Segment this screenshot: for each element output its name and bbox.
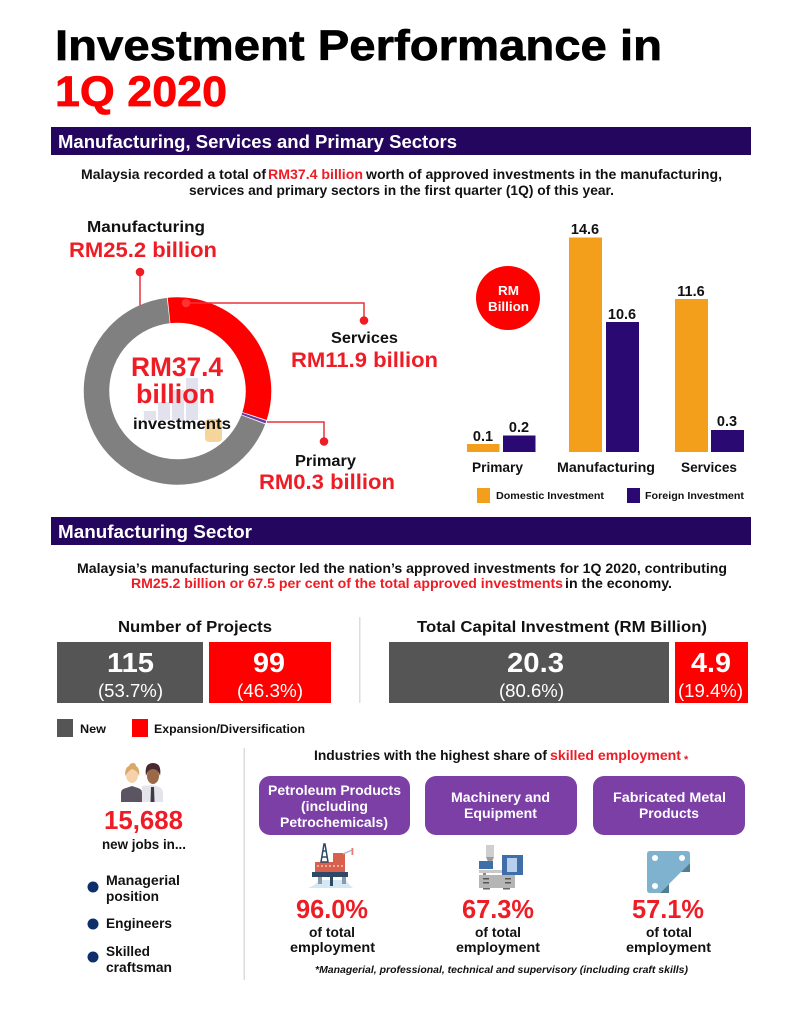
manufacturing paragraph: Malaysia’s manufacturing sector led the nation’s approved investments for 1Q 2020, contributing (77, 561, 727, 576)
panel: new jobs (88, 763, 186, 975)
panel: number of projects: 99 (253, 647, 285, 678)
bars: primary: 0.1 (473, 429, 493, 445)
label: primary (259, 453, 395, 494)
list: job types (88, 872, 180, 975)
title (55, 22, 662, 116)
icon: two employees (121, 763, 163, 802)
chart legend (477, 488, 745, 503)
panel: petroleum products (259, 776, 410, 955)
bars: manufacturing: 14.6 (571, 222, 599, 238)
callout line: services (182, 299, 368, 325)
stat: 57.1%: 57.1% (632, 894, 704, 924)
unit badge: Billion (488, 300, 529, 314)
donut chart: investments by sector (69, 219, 438, 494)
list: job types: Managerial (106, 872, 180, 888)
bar chart: domestic and foreign investment (467, 222, 745, 503)
legend: new and expansion (57, 719, 305, 737)
manufacturing paragraph: in the economy. (565, 576, 672, 591)
legend: new and expansion: New (80, 722, 107, 736)
bars: manufacturing: 10.6 (608, 307, 636, 323)
panel: number of projects (57, 619, 331, 703)
list: job types: position (106, 888, 159, 904)
stat: 67.3%: of total (475, 924, 521, 940)
list: job types: Engineers (106, 915, 172, 931)
title: 1Q 2020 (55, 68, 227, 116)
panel: fabricated metal products: Products (639, 805, 699, 821)
bars: primary: 0.2 (509, 420, 529, 436)
label: manufacturing (69, 219, 217, 262)
unit badge: RM (498, 284, 519, 298)
panel: fabricated metal products: Fabricated Metal (613, 789, 726, 805)
chart legend: Domestic Investment (496, 490, 605, 502)
panel: total capital investment: 4.9 (691, 647, 731, 678)
panel: machinery and equipment (425, 776, 577, 955)
title: Investment Performance in (55, 22, 662, 70)
donut centre total: billion (136, 379, 215, 409)
bars: services: 11.6 (677, 284, 705, 300)
label: primary: Primary (295, 453, 356, 470)
footnote: *Managerial, professional, technical and supervisory (including craft skills) (315, 964, 688, 976)
callout line: primary (267, 422, 328, 446)
icon: machine (479, 845, 523, 890)
intro paragraph: worth of approved investments in the manufacturing, (365, 167, 722, 182)
panel: total capital investment: (19.4%) (678, 680, 743, 701)
manufacturing paragraph: RM25.2 billion or 67.5 per cent of the total approved investments (131, 576, 563, 591)
stat: 96.0%: employment (290, 939, 375, 955)
panel: total capital investment (389, 619, 748, 703)
panel: fabricated metal products (593, 776, 745, 955)
panel: number of projects: (53.7%) (98, 680, 163, 701)
stat: 96.0% (290, 894, 375, 955)
category labels (472, 459, 737, 475)
heading: skilled employment: Industries with the highest share of (314, 748, 548, 763)
bars: manufacturing (569, 222, 639, 452)
category labels: Primary (472, 459, 523, 475)
manufacturing paragraph (77, 561, 727, 591)
chart legend: Foreign Investment (645, 490, 745, 502)
intro paragraph: services and primary sectors in the first quarter (1Q) of this year. (189, 183, 614, 198)
donut centre total: investments (133, 416, 231, 433)
panel: petroleum products: Petrochemicals) (280, 814, 388, 830)
panel: petroleum products: Petroleum Products (268, 782, 401, 798)
stat: 67.3% (456, 894, 540, 955)
donut centre total: RM37.4 (131, 352, 223, 382)
label: manufacturing: RM25.2 billion (69, 239, 217, 262)
category labels: Manufacturing (557, 459, 655, 475)
category labels: Services (681, 459, 737, 475)
heading: skilled employment: skilled employment (550, 748, 682, 763)
label: services: RM11.9 billion (291, 349, 438, 372)
stat: 57.1%: employment (626, 939, 711, 955)
panel: total capital investment: (80.6%) (499, 680, 564, 701)
section header: manufacturing, services and primary (51, 127, 751, 155)
panel: number of projects: (46.3%) (237, 680, 303, 701)
jobs figure (102, 805, 186, 852)
stat: 67.3%: employment (456, 939, 540, 955)
stat: 57.1% (626, 894, 711, 955)
faded icon: bars and coins (144, 378, 222, 442)
heading: skilled employment (314, 748, 689, 766)
bars: primary (467, 420, 536, 452)
intro paragraph (81, 167, 722, 198)
jobs figure: 15,688 (104, 805, 183, 835)
panel: machinery and equipment: Equipment (464, 805, 537, 821)
stat: 67.3%: 67.3% (462, 894, 534, 924)
jobs figure: new jobs in... (102, 836, 186, 852)
panel: total capital investment: 20.3 (507, 647, 564, 678)
section header: manufacturing sector (51, 517, 751, 545)
panel: total capital investment: Total Capital Investment (RM Billion) (417, 619, 707, 636)
panel: number of projects: 115 (107, 647, 154, 678)
icon: metal plate (647, 851, 690, 893)
callout line: manufacturing (136, 268, 144, 306)
icon: oil rig (308, 844, 353, 888)
panel: machinery and equipment: Machinery and (451, 789, 550, 805)
donut ring (96, 310, 259, 472)
label: manufacturing: Manufacturing (87, 219, 205, 236)
list: job types: craftsman (106, 959, 172, 975)
unit badge (476, 266, 540, 330)
stat: 96.0%: of total (309, 924, 355, 940)
label: services (291, 330, 438, 372)
list: job types: Skilled (106, 943, 150, 959)
section header: manufacturing, services and primary: Manufacturing, Services and Primary Sectors (58, 132, 457, 152)
label: services: Services (331, 330, 398, 347)
bars: services (675, 284, 744, 452)
intro paragraph: RM37.4 billion (268, 167, 363, 182)
stat: 57.1%: of total (646, 924, 692, 940)
legend: new and expansion: Expansion/Diversification (154, 722, 305, 736)
heading: skilled employment: * (684, 754, 689, 766)
label: primary: RM0.3 billion (259, 471, 395, 494)
section header: manufacturing sector: Manufacturing Sector (58, 522, 252, 542)
intro paragraph: Malaysia recorded a total of (81, 167, 267, 182)
panel: number of projects: Number of Projects (118, 619, 272, 636)
bars: services: 0.3 (717, 414, 737, 430)
donut centre total (131, 352, 231, 433)
stat: 96.0%: 96.0% (296, 894, 368, 924)
panel: petroleum products: (including (301, 798, 368, 814)
